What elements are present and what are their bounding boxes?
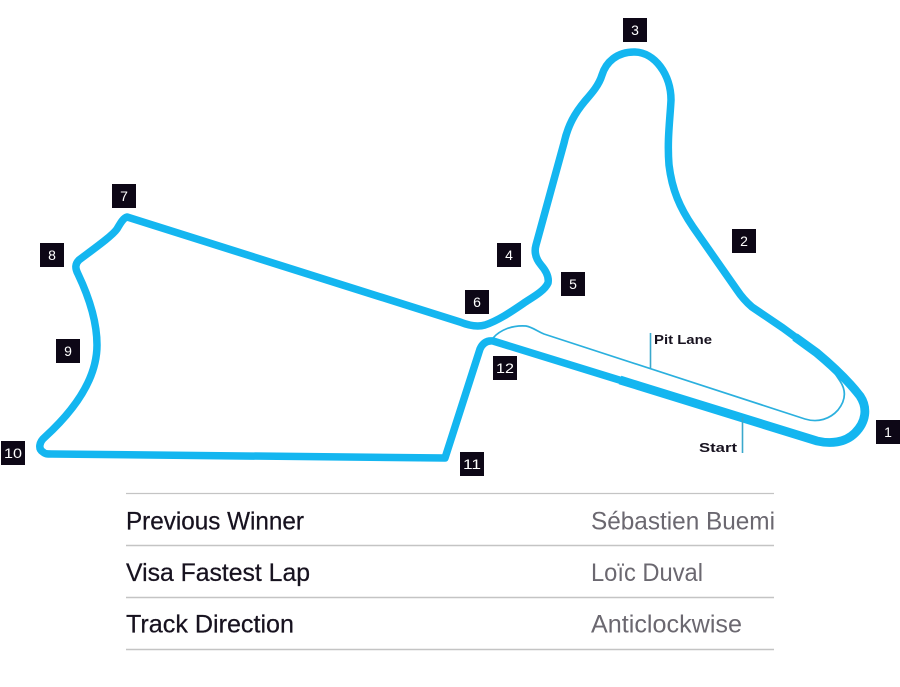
badge 2: 2: [740, 233, 748, 249]
row: track direction: [126, 610, 742, 638]
badge 10: 10: [4, 445, 22, 461]
start marker: [699, 417, 742, 455]
row: previous winner: [126, 508, 775, 536]
badge 11: [460, 452, 484, 476]
racing circuit outline: [40, 52, 865, 458]
badge 1: 1: [884, 424, 892, 440]
turn number badges: [1, 18, 900, 476]
badge 6: [465, 290, 489, 314]
badge 4: [497, 243, 521, 267]
badge 2: [732, 229, 756, 253]
badge 3: 3: [631, 22, 639, 38]
pit lane path: [493, 326, 844, 421]
track map: [40, 52, 865, 458]
row: track direction: Anticlockwise: [591, 610, 742, 638]
pit lane marker: Pit Lane: [654, 332, 712, 347]
row: visa fastest lap: Visa Fastest Lap: [126, 559, 310, 587]
row: visa fastest lap: Loïc Duval: [591, 559, 703, 587]
badge 3: [623, 18, 647, 42]
badge 5: [561, 272, 585, 296]
row: visa fastest lap: [126, 559, 703, 587]
thicker start straight and turn 1: [620, 337, 865, 442]
badge 4: 4: [505, 247, 513, 263]
pit lane marker: [650, 332, 712, 368]
badge 12: [493, 356, 517, 380]
badge 10: [1, 441, 25, 465]
row: track direction: Track Direction: [126, 610, 294, 638]
badge 1: [876, 420, 900, 444]
badge 9: [56, 339, 80, 363]
badge 7: 7: [120, 188, 128, 204]
badge 5: 5: [569, 276, 577, 292]
start marker: Start: [699, 440, 738, 455]
badge 9: 9: [64, 343, 72, 359]
race facts table: [126, 494, 775, 650]
badge 12: 12: [496, 360, 514, 376]
row: previous winner: Sébastien Buemi: [591, 508, 775, 536]
badge 6: 6: [473, 294, 481, 310]
badge 7: [112, 184, 136, 208]
row: previous winner: Previous Winner: [126, 508, 304, 536]
badge 8: [40, 243, 64, 267]
badge 11: 11: [463, 456, 481, 472]
badge 8: 8: [48, 247, 56, 263]
